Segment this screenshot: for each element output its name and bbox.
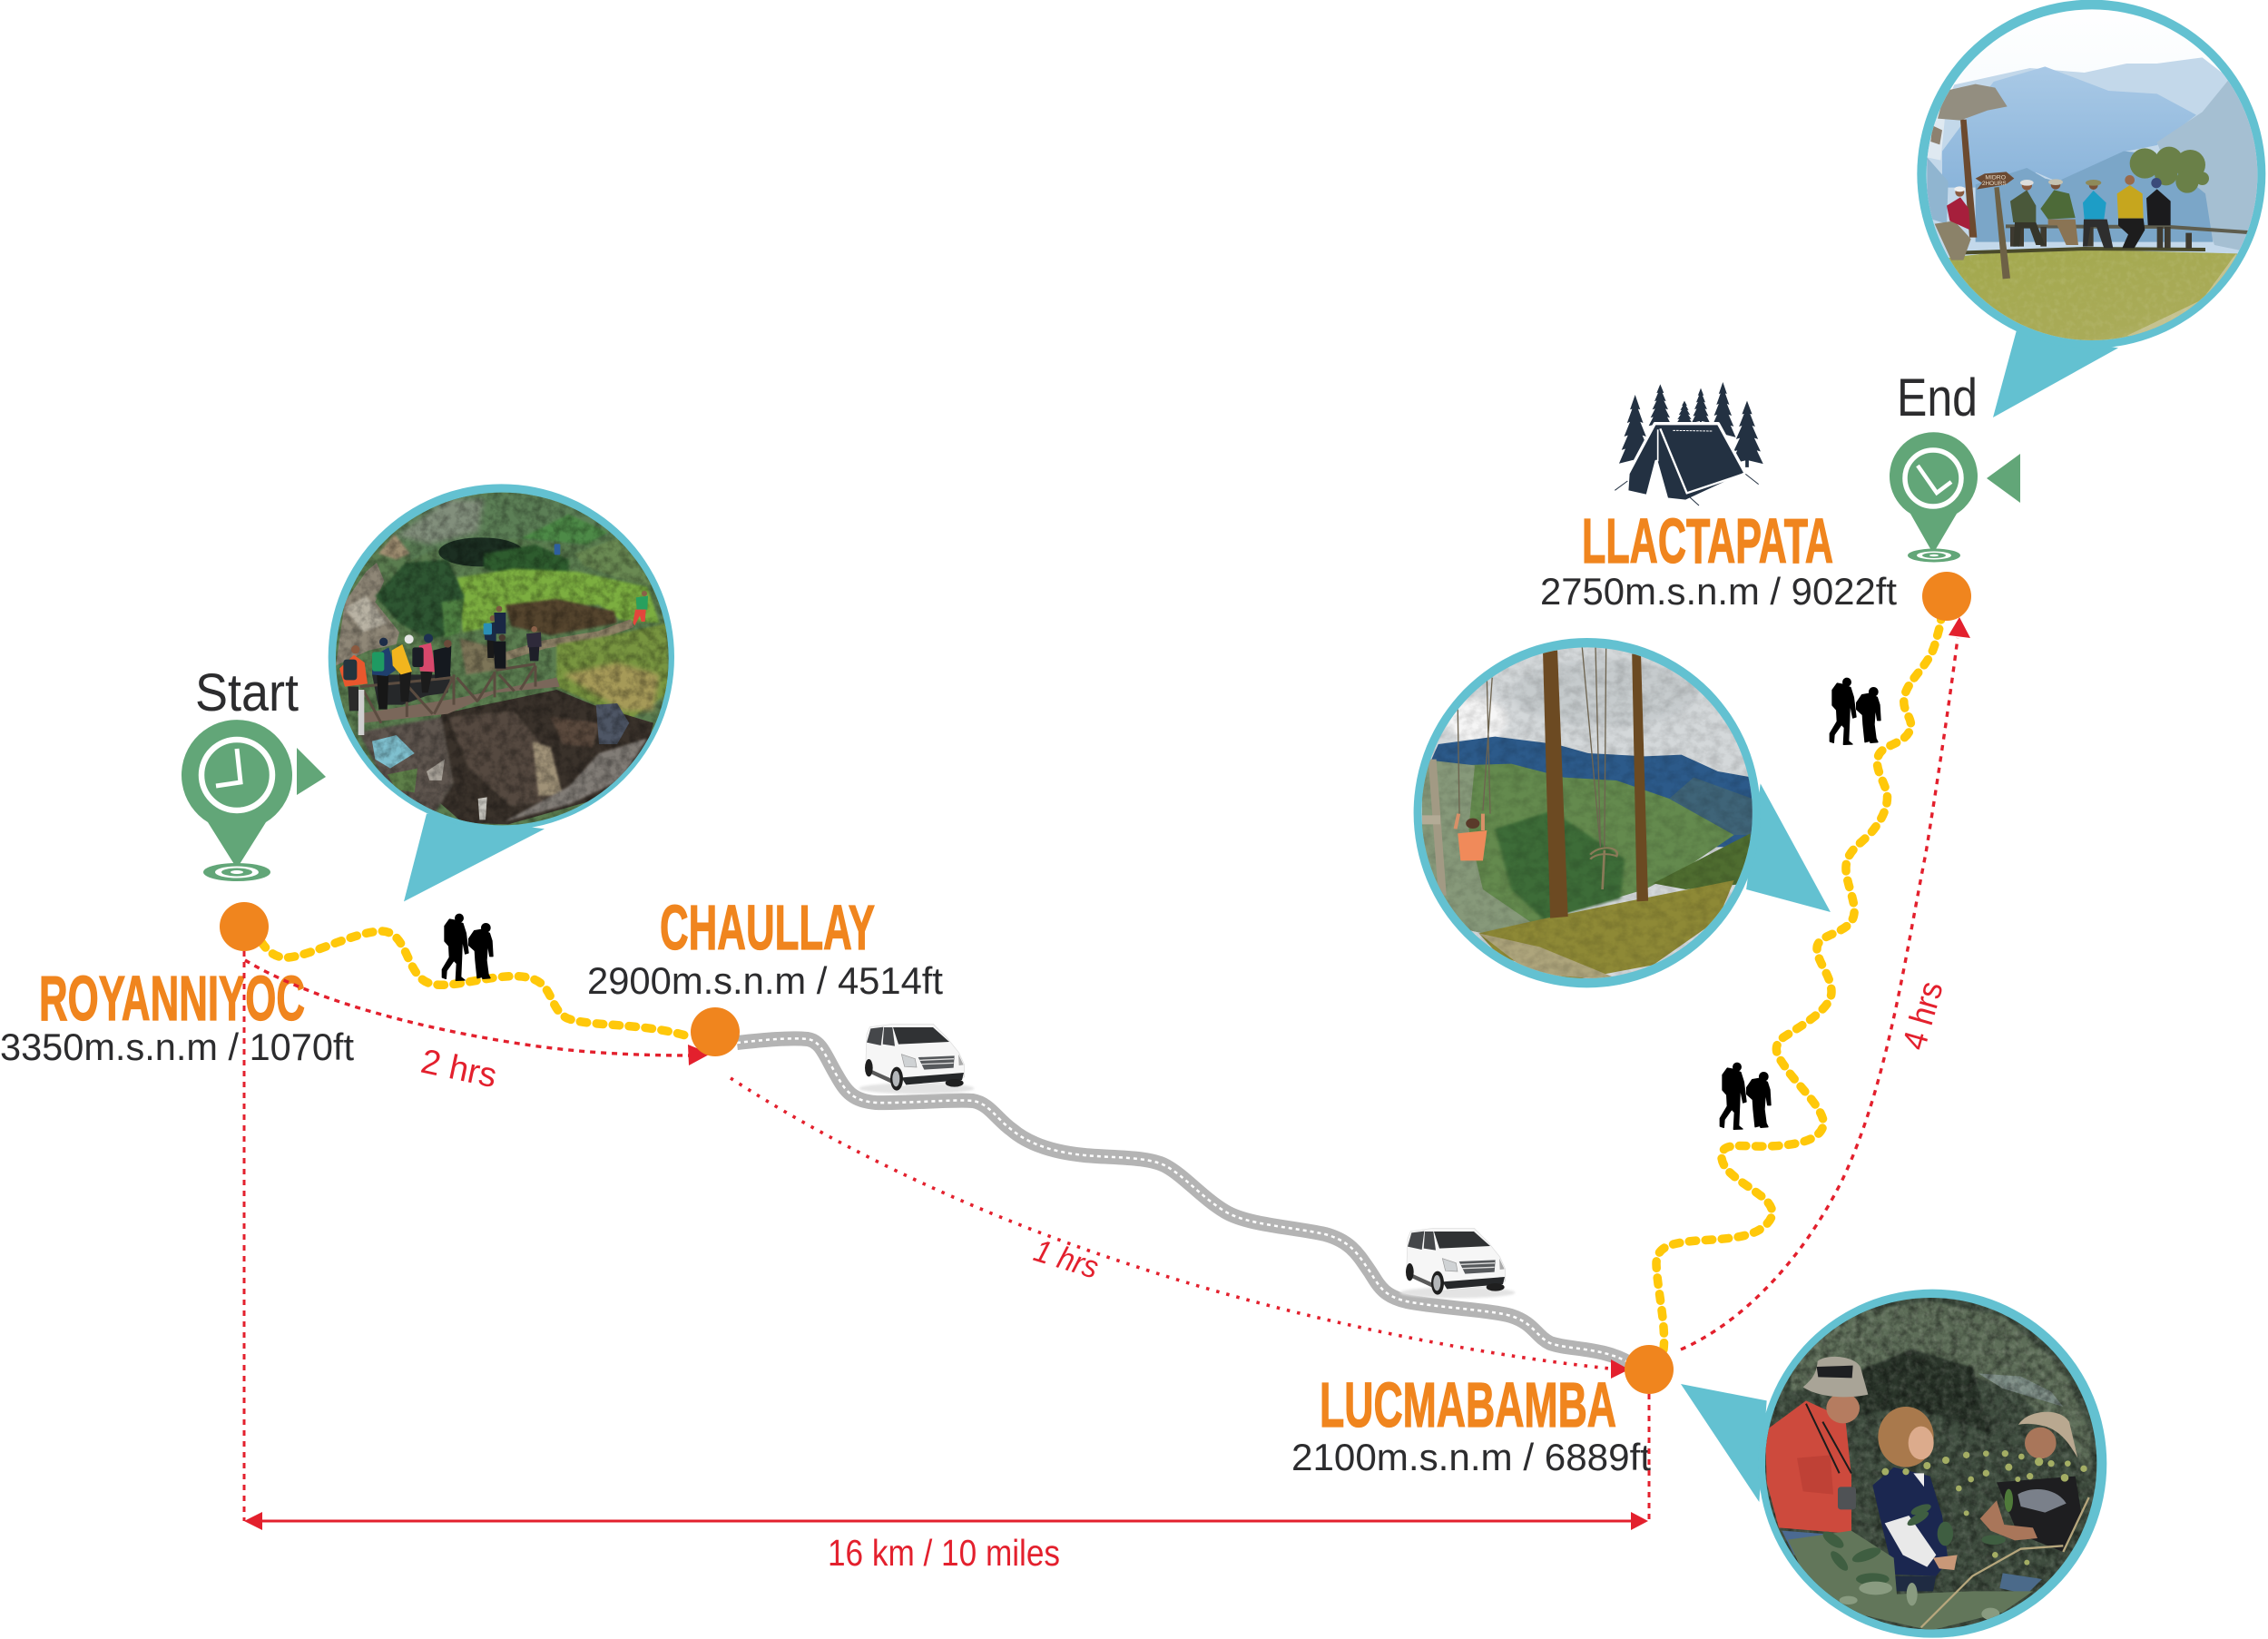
photo scene xyxy=(336,492,669,826)
altitude: Royanniyoc: 3350m.s.n.m / 1070ft xyxy=(0,1026,354,1068)
altitude: Chaullay: 2900m.s.n.m / 4514ft xyxy=(587,959,943,1002)
icon: hikers on lower final trail xyxy=(1720,1063,1771,1129)
altitude: Llactapata: 2750m.s.n.m / 9022ft xyxy=(1540,570,1897,613)
trail: Royanniyoc to Chaullay xyxy=(261,931,692,1037)
ring xyxy=(1758,1290,2106,1638)
icon: van upper xyxy=(859,1024,974,1094)
arrow: Start pin pointer xyxy=(297,748,326,795)
icon: hikers on upper final trail xyxy=(1830,678,1880,744)
stop: Royanniyoc xyxy=(220,902,269,951)
woman in hat xyxy=(1980,1412,2081,1595)
hikers on bridge xyxy=(339,544,648,711)
sign post xyxy=(1976,172,2014,279)
swing poles xyxy=(1543,651,1568,918)
label: 2 hrs: 2 hrs xyxy=(417,1043,500,1095)
heading: Chaullay: CHAULLAY xyxy=(660,892,875,963)
photo callout: coffee farm at Lucmabamba xyxy=(1681,1290,2106,1638)
icon: van lower xyxy=(1400,1228,1515,1298)
callout tail xyxy=(1746,783,1831,912)
photo callout: End viewpoint xyxy=(1915,0,2268,417)
heading: Royanniyoc: ROYANNIYOC xyxy=(39,963,305,1034)
pin body xyxy=(1890,432,1978,554)
sign post: 2HOURS xyxy=(1982,181,2007,187)
stop: Lucmabamba xyxy=(1625,1345,1674,1394)
group sitting on the bench xyxy=(1947,175,2171,248)
photo callout: swing at Llactapata approach xyxy=(1414,638,1831,987)
heading: Lucmabamba: LUCMABAMBA xyxy=(1320,1369,1616,1440)
dashed route: Royanniyoc to Chaullay, 2 hrs xyxy=(245,960,711,1065)
distance bracket: 16 km xyxy=(244,951,1649,1530)
tree xyxy=(2130,147,2209,193)
photo callout: Start bridge xyxy=(327,481,681,901)
clock face xyxy=(1905,450,1961,506)
road: Chaullay to Lucmabamba xyxy=(737,1038,1634,1366)
pin: End marker xyxy=(1890,432,1978,563)
man in red shirt xyxy=(1765,1357,1868,1561)
pin base target xyxy=(203,863,270,881)
callout tail xyxy=(1993,331,2118,417)
label: Start: Start xyxy=(195,663,299,722)
ropes xyxy=(1458,647,1606,847)
icon: tent and forest xyxy=(1615,382,1763,505)
trail: Lucmabamba to Llactapata xyxy=(1656,617,1941,1349)
pin base target xyxy=(1908,548,1960,563)
photo scene xyxy=(1761,1295,2103,1634)
stop: Llactapata xyxy=(1922,572,1971,621)
icon: hikers on first trail xyxy=(442,914,493,980)
pin body xyxy=(182,720,292,869)
label: 1 hrs: 1 hrs xyxy=(1030,1232,1103,1286)
sign post: MIDRO xyxy=(1985,174,2006,181)
swinging person xyxy=(1456,814,1487,860)
woman in navy xyxy=(1872,1407,1958,1591)
rock and thatch post xyxy=(1930,84,2008,260)
heading: Llactapata: LLACTAPATA xyxy=(1582,505,1833,576)
label: 4 hrs: 4 hrs xyxy=(1895,977,1950,1054)
label: End: End xyxy=(1897,368,1978,427)
foreground foliage xyxy=(1788,1489,2089,1631)
label: 16 km / 10 miles: 16 km / 10 miles xyxy=(828,1532,1060,1574)
dashed route: Chaullay to Lucmabamba, 1 hrs xyxy=(731,1078,1629,1379)
pin: Start marker xyxy=(182,720,292,881)
ring xyxy=(1414,638,1761,987)
stop: Chaullay xyxy=(691,1007,740,1056)
coffee berries xyxy=(1881,1450,2087,1565)
callout tail xyxy=(1681,1384,1767,1502)
photo scene xyxy=(1926,9,2258,340)
altitude: Lucmabamba: 2100m.s.n.m / 6889ft xyxy=(1291,1436,1651,1478)
bench xyxy=(2006,226,2248,249)
clock face xyxy=(201,740,272,810)
ring xyxy=(329,484,674,830)
ring xyxy=(1917,0,2265,348)
callout tail xyxy=(404,814,545,901)
arrow: End pin pointer xyxy=(1987,454,2020,503)
dashed route: Lucmabamba to Llactapata, 4 hrs xyxy=(1681,617,1970,1349)
photo scene xyxy=(1414,642,1762,983)
